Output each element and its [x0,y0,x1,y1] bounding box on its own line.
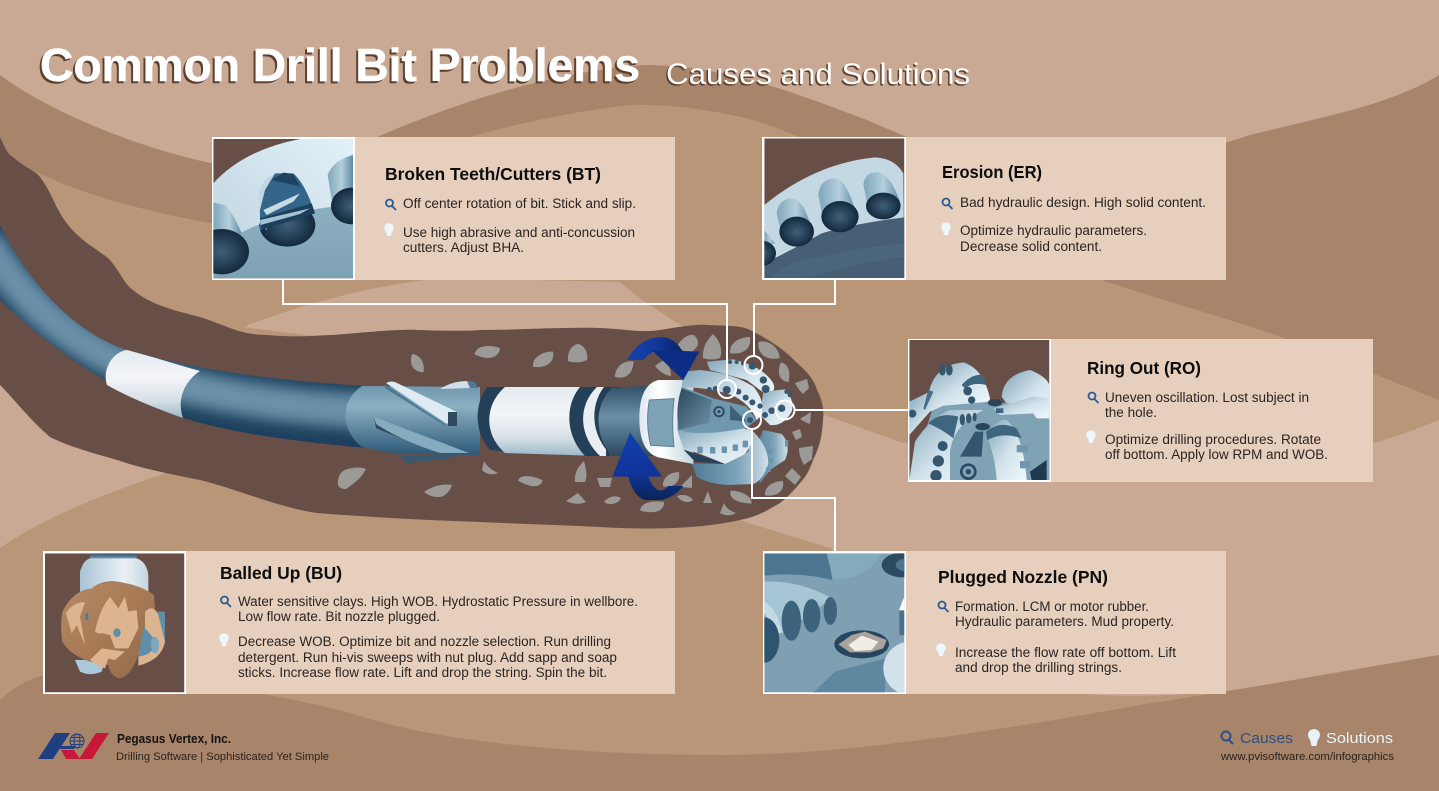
cause text [955,599,1174,629]
solution text [955,645,1176,675]
solution text: Use high abrasive and anti-concussion [403,225,635,240]
heading: Plugged Nozzle (PN) [938,567,1108,587]
title: Common Drill Bit Problems [40,39,640,91]
legend [1220,729,1395,763]
heading: Ring Out (RO) [1087,358,1201,378]
icon: cause [221,596,231,607]
cause text: Low flow rate. Bit nozzle plugged. [238,609,440,624]
panel: Erosion [747,137,1226,280]
cause text: the hole. [1105,405,1157,420]
heading: Balled Up (BU) [220,563,342,583]
icon: solution [219,633,229,646]
image: broken cutter [213,139,353,278]
cause text [238,594,638,624]
cause text: Water sensitive clays. High WOB. Hydrostatic Pressure in wellbore. [238,594,638,609]
rotation arrows [612,337,699,500]
solution text [960,223,1147,254]
title: Common Drill Bit Problems [38,41,638,93]
panel: Balled Up [43,551,675,694]
legend: Solutions [1326,730,1393,747]
cause text: Hydraulic parameters. Mud property. [955,614,1174,629]
cause text [1105,390,1309,420]
subtitle: Causes and Solutions [666,58,970,91]
solution text: Decrease WOB. Optimize bit and nozzle selection. Run drilling [238,634,611,649]
icon: cause [386,200,396,210]
white pipe band [106,350,200,418]
icon: solution [1086,430,1096,443]
subtitle: Causes and Solutions [664,60,968,92]
panel: Ring Out [908,339,1373,482]
icon: cause [938,602,948,612]
company name [116,732,329,763]
solution text: Optimize drilling procedures. Rotate [1105,432,1321,447]
heading: Broken Teeth/Cutters (BT) [385,164,601,184]
solution text: cutters. Adjust BHA. [403,240,524,255]
panel: Broken Teeth/Cutters [194,137,675,280]
logo [38,733,109,759]
image: eroded cutters [764,138,904,278]
solution text: and drop the drilling strings. [955,660,1122,675]
solution text: Increase the flow rate off bottom. Lift [955,645,1176,660]
solution text: Decrease solid content. [960,239,1102,254]
company name: Drilling Software | Sophisticated Yet Simple [116,751,329,763]
icon: cause [942,198,952,209]
cause text: Off center rotation of bit. Stick and slip. [403,196,636,211]
legend: www.pvisoftware.com/infographics [1220,751,1395,763]
stabilizer sub [346,381,480,463]
drill bit [639,359,792,485]
cause text: Formation. LCM or motor rubber. [955,599,1149,614]
solution text: detergent. Run hi-vis sweeps with nut plug. Add sapp and soap [238,650,617,665]
white sub section with rings [478,385,660,456]
cause text: Bad hydraulic design. High solid content. [960,195,1206,210]
image: balled up bit [45,553,184,692]
image: ring out bit [908,340,1049,481]
icon: solution [941,222,951,235]
legend: Causes [1240,730,1293,747]
image: plugged nozzle [764,553,904,692]
icon: solution [936,643,946,656]
wellbore [0,137,823,529]
rock cuttings [338,334,813,515]
company name: Pegasus Vertex, Inc. [117,732,231,746]
solution text [1105,432,1328,462]
drill pipe [0,226,365,448]
connector lines and target circles [283,280,908,551]
icon: solution [384,223,394,236]
cause text: Uneven oscillation. Lost subject in [1105,390,1309,405]
solution text: sticks. Increase flow rate. Lift and drop the string. Spin the bit. [238,665,607,680]
panel: Plugged Nozzle [749,551,1226,695]
solution text: Optimize hydraulic parameters. [960,223,1147,238]
solution text: off bottom. Apply low RPM and WOB. [1105,447,1328,462]
solution text [403,225,635,255]
heading: Erosion (ER) [942,162,1042,182]
icon: cause [1088,392,1098,403]
solution text [238,634,617,680]
